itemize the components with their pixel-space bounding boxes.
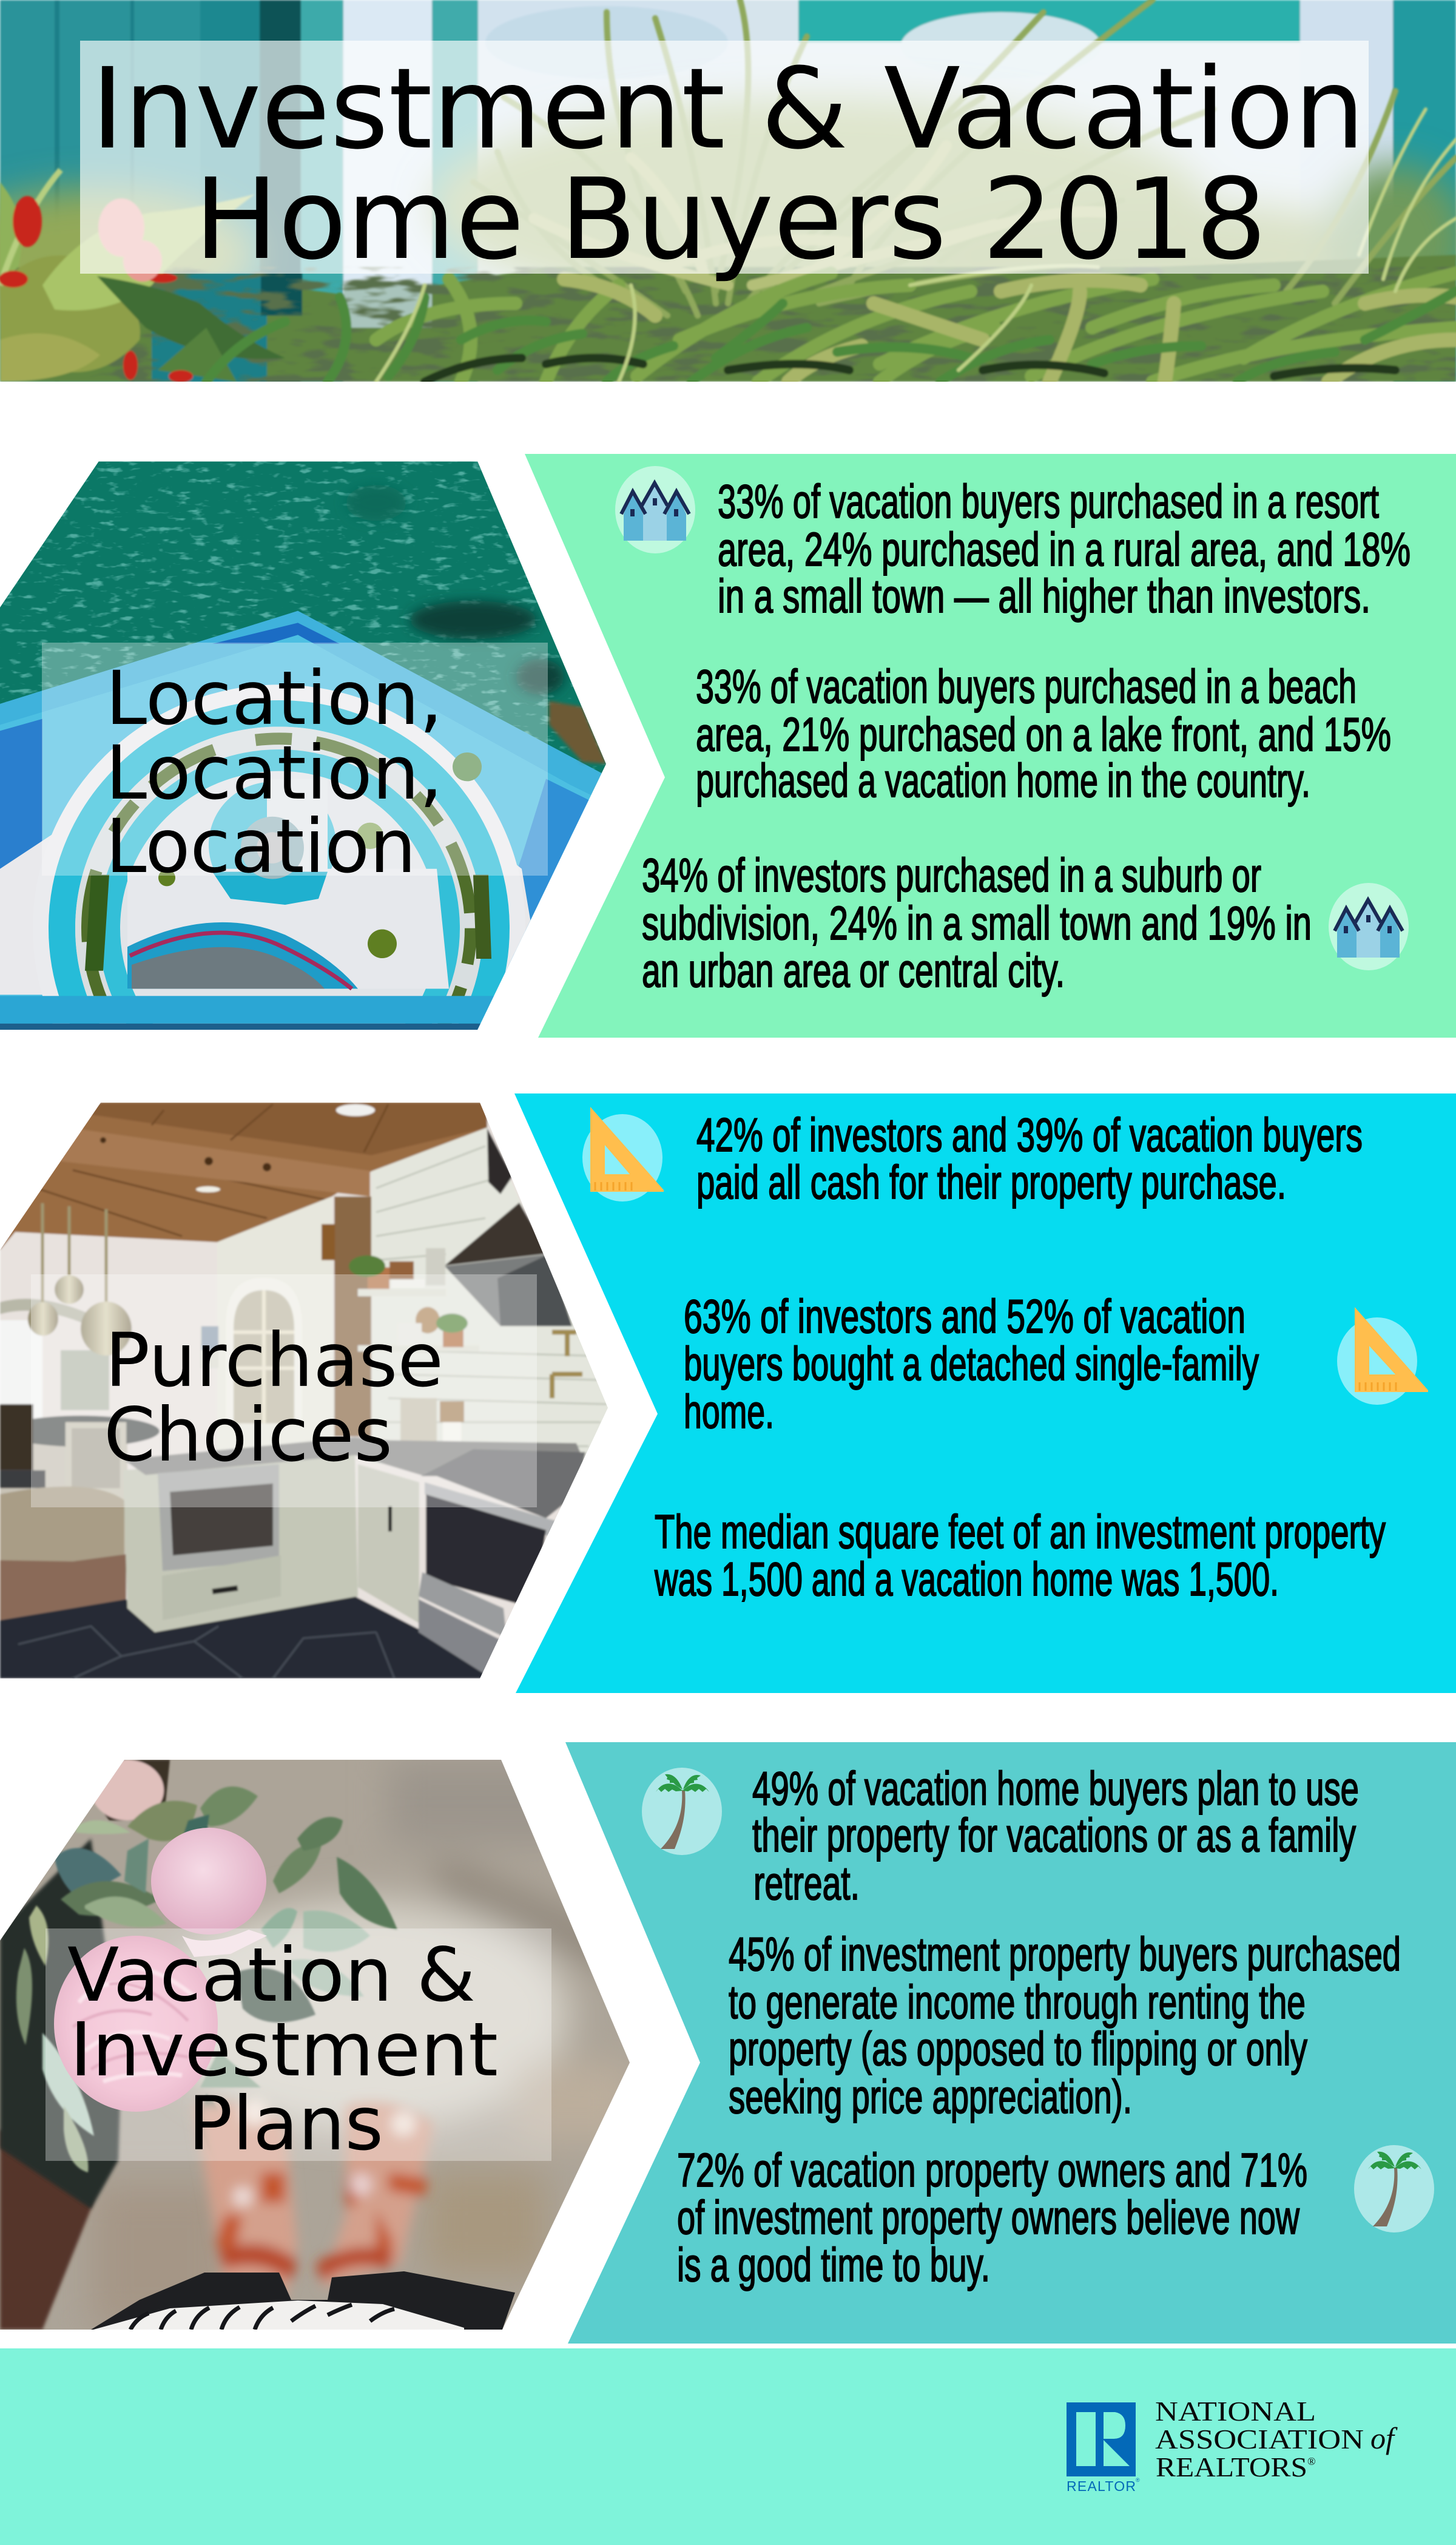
faucet [552,1332,582,1398]
section 1 heading panel [42,643,548,890]
corner mosaics [0,719,42,875]
fact: rental income: seeking price appreciation). [729,2070,1132,2123]
section 3 heading [67,1932,498,2167]
concentric arcs [33,684,525,1172]
shelves and jars [358,1289,446,1296]
icon: houses [1329,883,1409,970]
fact: family retreat: retreat. [753,1856,860,1910]
hand [0,2130,106,2330]
red and pink flowers [0,196,193,382]
fact: rental income [729,1927,1401,2123]
logo: REALTOR block R [1067,2402,1140,2494]
logo: association name: NATIONAL [1155,2396,1316,2427]
fact: good time to buy: is a good time to buy. [677,2238,990,2291]
fact: investors suburb: an urban area or central city. [642,944,1065,997]
title text [91,44,1365,285]
wood floor [0,1554,126,1620]
title text: Home Buyers 2018 [194,155,1267,285]
stove [421,1449,585,1518]
dark tile floor [0,1596,497,1678]
wave mosaic and grey inlay [127,922,358,989]
blurred sandaled feet [194,2098,434,2300]
fact: detached home: home. [684,1385,774,1438]
section 3 heading: Investment [70,2007,498,2093]
fountain platform [212,872,328,905]
pendant lamps [42,1203,106,1302]
bottom blue strip [0,996,607,1024]
timber post [334,1197,372,1436]
section 1 heading: Location [106,803,416,890]
deck rim [0,611,607,1029]
section 1 heading [106,655,443,890]
fact: good time to buy [677,2143,1307,2291]
title panel [80,41,1369,285]
section 2 heading panel [31,1274,537,1507]
dark shorts [91,2271,515,2330]
fact: detached home [684,1289,1259,1438]
dining area [0,1440,127,1572]
section 3 heading: Plans [188,2081,383,2167]
fact: beach area [696,660,1391,807]
counter and base cabinets [123,1452,358,1632]
pink peonies [151,1828,266,1935]
section 2 heading: Purchase [105,1317,443,1404]
title text: Investment & Vacation [91,44,1365,174]
upper pale blades [473,0,1456,316]
lower bright blades [376,273,1456,382]
logo: association name [1155,2396,1398,2482]
fact: investors suburb [642,848,1312,997]
left big leaves [0,255,140,372]
icon: set square [582,1107,664,1202]
rear wall and window [0,1320,42,1446]
section 2 heading [104,1317,443,1478]
wall and arch door [217,1197,335,1452]
panel: purchase facts [514,1093,1456,1693]
panel: location facts [525,454,1456,1038]
section 1 heading: Location, [106,655,443,742]
fact: detached home: 63% of investors and 52% of vacation [684,1289,1245,1343]
ceiling wood [0,1103,487,1250]
bouquet shadow [0,1839,121,2209]
rug [0,1487,124,1562]
fact: all cash [696,1108,1363,1209]
fact: resort area [718,475,1410,623]
section 3 heading: Vacation & [67,1932,476,2018]
logo: REALTOR block R: ® [1136,2477,1140,2483]
range hood [487,1128,513,1194]
brick wall [371,1127,613,1464]
section 2 heading: Choices [104,1392,393,1478]
right cabinets [358,1464,419,1623]
hero photo: tropical house with foliage [0,0,1456,382]
rocks [549,701,607,764]
logo: association name: REALTORS [1156,2452,1307,2482]
icon: set square [1337,1307,1428,1405]
section 1 heading: Location, [106,730,443,816]
fact: median square feet [654,1505,1386,1606]
footer band [0,2348,1456,2545]
fact: family retreat [752,1762,1359,1910]
logo: association name: ® [1307,2455,1316,2467]
icon: palm tree [1354,2145,1434,2232]
soft plant mass behind the title [0,97,1456,322]
section 3 heading panel [46,1928,551,2167]
section 3 photo: flowers and sandals on boards [0,1760,631,2330]
panel: plans facts [565,1742,1456,2344]
icon: palm tree [642,1768,722,1855]
logo: association name: of [1370,2421,1398,2455]
foliage mass [0,255,1456,382]
section 1 photo: aerial view of pool deck and sea [0,461,606,1030]
icon: houses [615,466,695,553]
palms [158,752,482,958]
section 2 photo: kitchen interior [0,1103,613,1678]
striped top [93,2300,464,2330]
leaves [16,1760,397,2185]
logo: association name: ASSOCIATION [1155,2424,1364,2455]
logo: REALTOR block R: REALTOR [1067,2478,1136,2494]
